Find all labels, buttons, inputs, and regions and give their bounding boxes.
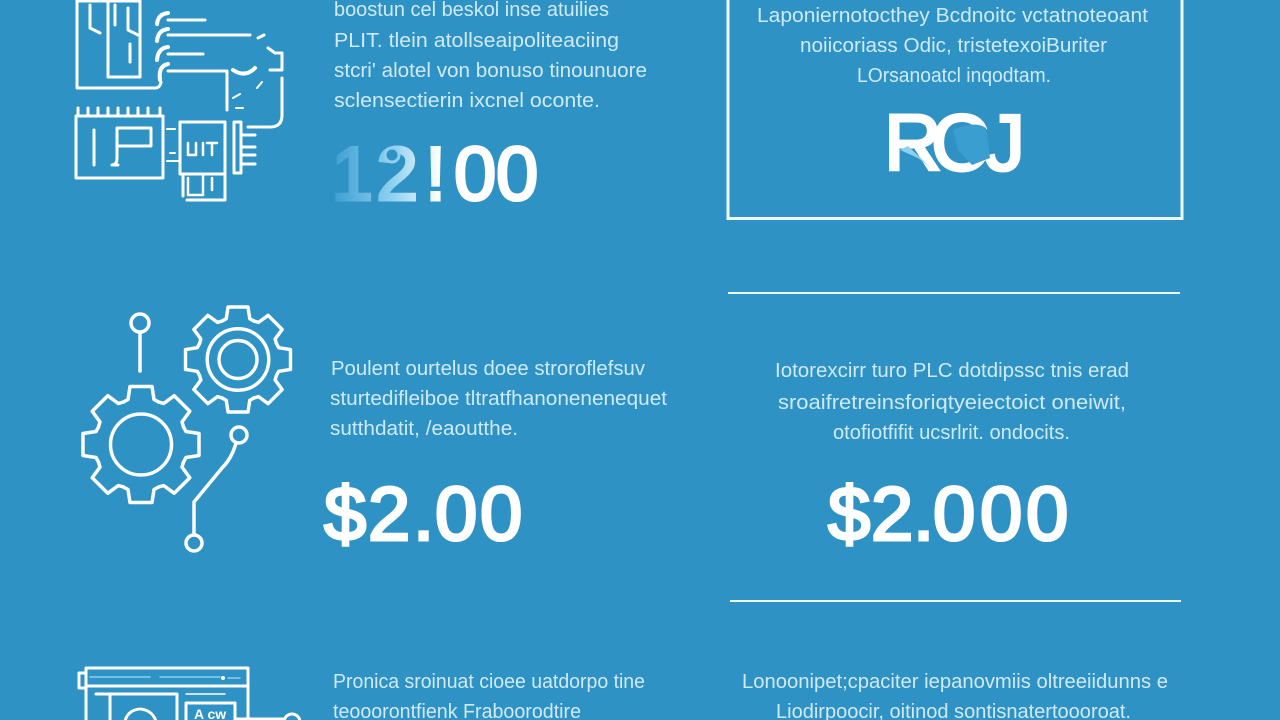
text block: middle left description bbox=[330, 358, 667, 440]
text block: middle right description: otofiotfifit ucsrlrit. ondocits. bbox=[833, 422, 1070, 444]
icon: large gear bbox=[83, 386, 199, 502]
icon: gears and connectors bbox=[83, 307, 290, 551]
text block: top left description: sclensectierin ixcnel oconte. bbox=[334, 90, 600, 112]
text block: middle left description: sutthdatit, /eaoutthe. bbox=[330, 418, 518, 440]
text block: middle right description bbox=[775, 360, 1129, 444]
text block: middle left description: sturtedifleiboe tltratfhanonenenequet bbox=[330, 388, 667, 410]
text block: ROI description: Laponiernotocthey Bcdnoitc vctatnoteoant bbox=[757, 5, 1148, 27]
icon: circuit and PLC module bbox=[76, 1, 282, 200]
text block: ROI description: LOrsanoatcl inqodtam. bbox=[857, 65, 1051, 87]
text block: bottom left description bbox=[333, 671, 645, 720]
text block: bottom right description bbox=[742, 671, 1168, 720]
number: middle left price: $2.00 bbox=[324, 472, 522, 557]
number: middle right price: $2.000 bbox=[828, 472, 1068, 557]
icon: connector bottom bbox=[186, 427, 247, 551]
icon: connector top bbox=[131, 314, 149, 371]
text block: middle right description: Iotorexcirr turo PLC dotdipssc tnis erad bbox=[775, 360, 1129, 382]
text block: ROI description bbox=[757, 5, 1148, 87]
icon: control panel window bbox=[79, 668, 300, 720]
text block: top left description: PLIT. tlein atollseaipoliteaciing bbox=[334, 30, 619, 52]
text block: bottom left description: Pronica sroinuat cioee uatdorpo tine bbox=[333, 671, 645, 693]
text block: ROI description: noiicoriass Odic, tristetexoiBuriter bbox=[800, 35, 1107, 57]
text block: middle left description: Poulent ourtelus doee stroroflefsuv bbox=[331, 358, 645, 380]
divider bbox=[728, 292, 1180, 294]
text block: top left description bbox=[334, 0, 647, 112]
heading: ROI label: RCJ bbox=[884, 98, 1025, 187]
panel: ROI callout bbox=[728, 0, 1182, 218]
number: top left price: 12!00 bbox=[331, 132, 538, 217]
icon: small gear bbox=[186, 307, 290, 412]
text block: bottom right description: Lonoonipet;cpaciter iepanovmiis oltreeiidunns e bbox=[742, 671, 1168, 693]
text block: top left description: stcri' alotel von bonuso tinounuore bbox=[334, 60, 647, 82]
text block: middle right description: sroaifretreinsforiqtyeiectoict oneiwit, bbox=[778, 392, 1126, 414]
divider bbox=[730, 600, 1181, 602]
